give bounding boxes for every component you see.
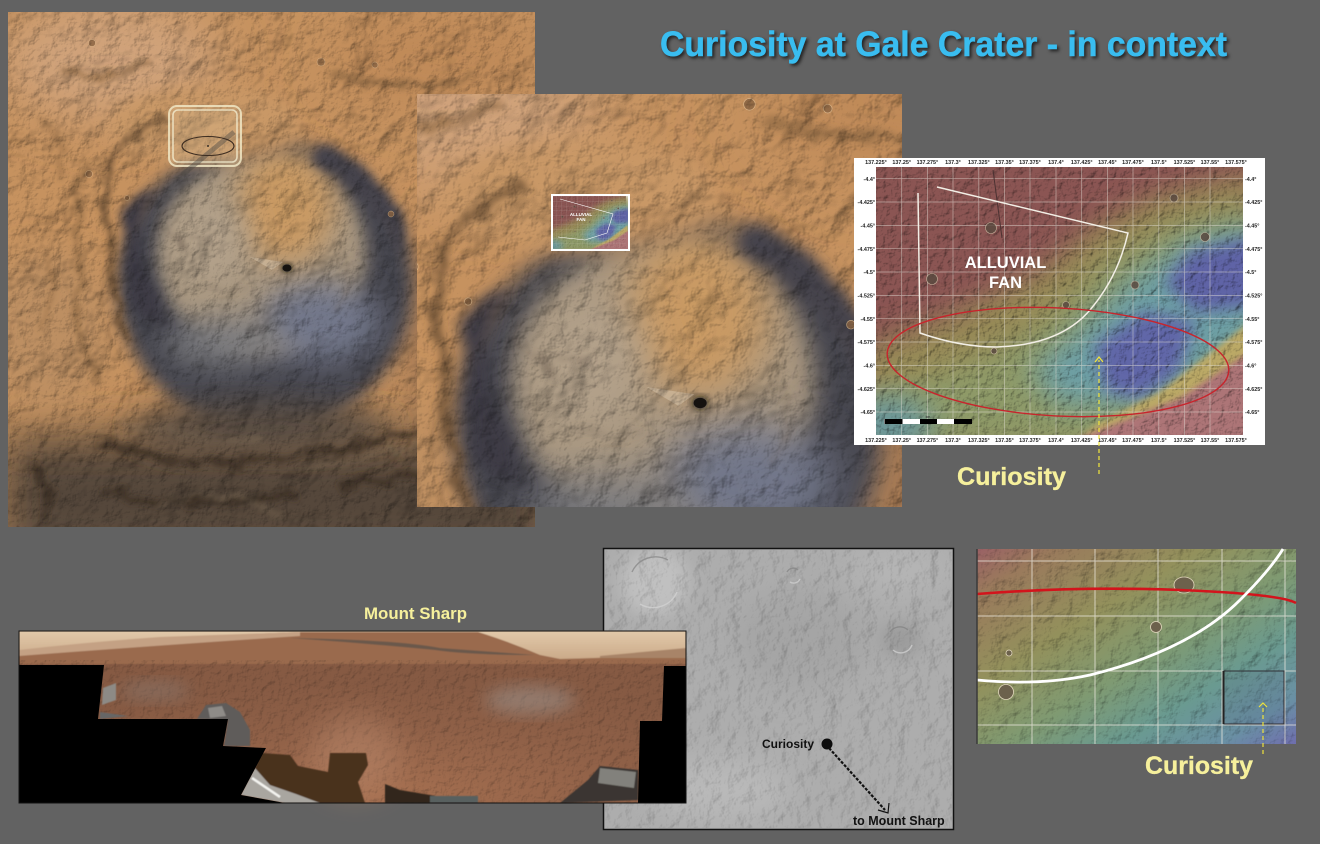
- right axis labels: -4.625°: [1245, 387, 1262, 393]
- top axis labels: 137.5°: [1151, 160, 1167, 166]
- inset map thumbnail: FAN: [576, 217, 586, 222]
- black mosaic gaps left: [19, 665, 285, 803]
- right axis labels: -4.55°: [1245, 317, 1259, 323]
- crop square: [1224, 671, 1284, 724]
- panel: wide orbital view of Gale Crater: [8, 12, 535, 527]
- marker: Curiosity: [822, 738, 832, 750]
- bottom axis labels: 137.475°: [1122, 438, 1144, 444]
- left axis labels: [858, 177, 875, 416]
- left axis labels: -4.6°: [864, 364, 875, 370]
- ground detail: [19, 660, 686, 803]
- left axis labels: -4.5°: [864, 270, 875, 276]
- top axis labels: 137.35°: [995, 160, 1014, 166]
- top axis labels: 137.3°: [945, 160, 961, 166]
- bottom axis labels: 137.525°: [1174, 438, 1195, 444]
- top axis labels: 137.55°: [1201, 160, 1219, 166]
- rover parts left: [100, 683, 250, 746]
- right axis labels: -4.575°: [1245, 340, 1262, 346]
- bottom axis labels: 137.35°: [995, 438, 1014, 444]
- left axis labels: -4.425°: [858, 200, 875, 206]
- title: Curiosity at Gale Crater - in context: [660, 25, 1227, 64]
- inset map thumbnail: [544, 194, 630, 252]
- left axis labels: -4.65°: [861, 410, 875, 416]
- top axis labels: 137.325°: [968, 160, 990, 166]
- left axis labels: -4.4°: [864, 177, 875, 183]
- arrow: Curiosity on map: [1095, 357, 1103, 474]
- right axis labels: [1245, 177, 1262, 416]
- right axis labels: -4.475°: [1245, 247, 1262, 253]
- top axis labels: 137.225°: [865, 160, 887, 166]
- left axis labels: -4.55°: [861, 317, 875, 323]
- top axis labels: 137.475°: [1122, 160, 1144, 166]
- dashed line to Mount Sharp: [829, 748, 889, 813]
- panel: grey orbital image: [604, 548, 954, 830]
- bottom axis labels: 137.5°: [1151, 438, 1167, 444]
- panel: closer view of Gale Crater and Mount Sharp: [417, 94, 902, 507]
- white fan arc: [977, 549, 1283, 682]
- bottom axis labels: [865, 438, 1247, 444]
- shadow edge: [976, 549, 978, 744]
- right axis labels: -4.5°: [1245, 270, 1256, 276]
- inset map thumbnail: ALLUVIAL: [570, 212, 592, 217]
- left axis labels: -4.475°: [858, 247, 875, 253]
- top axis labels: 137.45°: [1098, 160, 1117, 166]
- black mosaic gaps right: [638, 666, 686, 803]
- left axis labels: -4.525°: [858, 294, 875, 300]
- top axis labels: 137.375°: [1019, 160, 1041, 166]
- landing ellipse: [884, 299, 1232, 425]
- bottom axis labels: 137.575°: [1225, 438, 1247, 444]
- right axis labels: -4.65°: [1245, 410, 1259, 416]
- bottom axis labels: 137.225°: [865, 438, 887, 444]
- panel: enlarged map crop: [977, 549, 1296, 744]
- rover wheel right: [560, 766, 638, 803]
- left axis labels: -4.575°: [858, 340, 875, 346]
- bottom axis labels: 137.425°: [1071, 438, 1093, 444]
- label: Curiosity: Curiosity: [762, 737, 814, 751]
- fan label: ALLUVIAL: [965, 254, 1046, 272]
- top axis labels: 137.575°: [1225, 160, 1247, 166]
- label: Mount Sharp: Mount Sharp: [364, 604, 467, 623]
- rover deck and shadow: [241, 753, 478, 803]
- right axis labels: -4.6°: [1245, 364, 1256, 370]
- panel: rover panorama: [19, 631, 686, 803]
- sky and horizon: [19, 631, 686, 664]
- bottom axis labels: 137.3°: [945, 438, 961, 444]
- right axis labels: -4.425°: [1245, 200, 1262, 206]
- bottom axis labels: 137.325°: [968, 438, 990, 444]
- left axis labels: -4.45°: [861, 224, 875, 230]
- alluvial fan outline: [918, 187, 1128, 347]
- red ellipse arc: [977, 589, 1296, 603]
- right axis labels: -4.525°: [1245, 294, 1262, 300]
- top axis labels: 137.4°: [1048, 160, 1064, 166]
- map image: [876, 167, 1243, 435]
- top axis labels: [865, 160, 1247, 166]
- label: Curiosity on map: Curiosity: [957, 463, 1066, 491]
- top axis labels: 137.525°: [1174, 160, 1195, 166]
- top axis labels: 137.425°: [1071, 160, 1093, 166]
- bottom axis labels: 137.375°: [1019, 438, 1041, 444]
- label: Curiosity on crop: Curiosity: [1145, 752, 1253, 780]
- right axis labels: -4.45°: [1245, 224, 1259, 230]
- top axis labels: 137.275°: [917, 160, 938, 166]
- left axis labels: -4.625°: [858, 387, 875, 393]
- arrow: Curiosity on crop: [1259, 703, 1267, 754]
- panel: topographic map of landing ellipse: [843, 158, 1265, 453]
- bottom axis labels: 137.45°: [1098, 438, 1117, 444]
- landing area highlight box: [169, 106, 241, 175]
- bottom axis labels: 137.4°: [1048, 438, 1064, 444]
- bottom axis labels: 137.55°: [1201, 438, 1219, 444]
- scale bar: [884, 415, 972, 424]
- top axis labels: 137.25°: [892, 160, 911, 166]
- bottom axis labels: 137.275°: [917, 438, 938, 444]
- scale bar: km: [926, 415, 930, 419]
- bottom axis labels: 137.25°: [892, 438, 911, 444]
- right axis labels: -4.4°: [1245, 177, 1256, 183]
- fan label: FAN: [989, 274, 1022, 292]
- label: to Mount Sharp: to Mount Sharp: [853, 814, 945, 828]
